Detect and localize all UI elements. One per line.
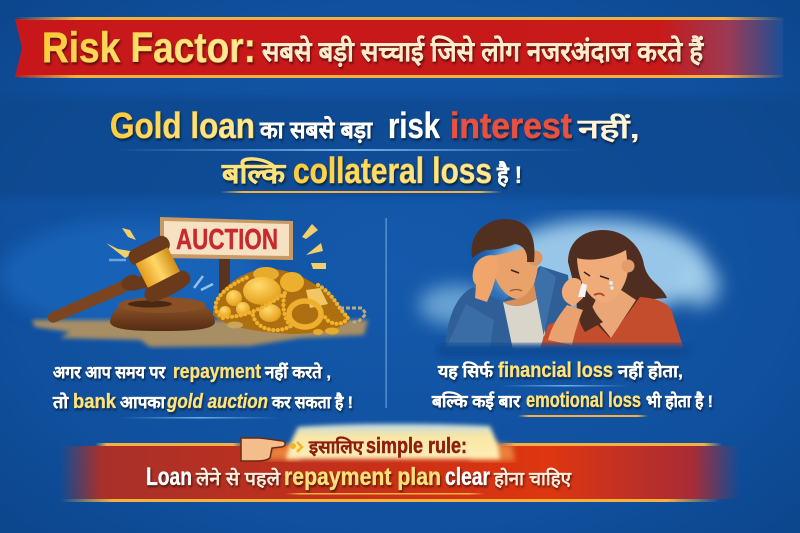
right caption line 1 [437, 359, 683, 382]
headline line 1: interest [450, 105, 572, 146]
gold pile [213, 267, 366, 335]
headline line 2: है ! [496, 161, 522, 189]
illustration: auction gavel and gold [32, 217, 368, 347]
caption line 2: कर सकता है ! [271, 392, 353, 412]
headline line 1: नहीं, [577, 113, 640, 144]
rule label: simple rule: [366, 433, 467, 458]
rule text: repayment plan [284, 463, 441, 491]
fade [438, 344, 690, 358]
rule text: clear [445, 463, 490, 491]
bottom banner [60, 424, 740, 502]
main headline [110, 105, 640, 191]
illustration: worried couple [419, 219, 720, 358]
rule label [308, 433, 467, 458]
headline line 1: Gold loan [110, 105, 255, 146]
banner highlight [265, 424, 515, 461]
rule text: Loan [146, 463, 192, 491]
left caption [52, 361, 353, 413]
man [445, 219, 575, 350]
caption line 2: आपका [120, 393, 166, 412]
gavel handle [48, 281, 127, 323]
gavel head [123, 232, 194, 306]
auction sign [160, 217, 293, 260]
gavel [48, 232, 215, 331]
caption line 1: अगर आप समय पर [53, 363, 166, 382]
caption line 2 [52, 391, 353, 413]
banner ribbon [15, 19, 783, 77]
right caption line 1: financial loss [498, 359, 613, 382]
title: Hindi subtitle: सबसे बड़ी सच्चाई जिसे लोग नजरअंदाज करते हैं [261, 35, 704, 67]
caption line 2: तो [52, 392, 69, 412]
right caption line 1: यह सिर्फ [437, 361, 494, 381]
caption line 1: नहीं करते , [264, 362, 331, 382]
headline line 1: risk [388, 105, 441, 146]
woman [540, 230, 684, 350]
arrow marker [290, 442, 302, 452]
headline line 1: का सबसे बड़ा [259, 116, 373, 144]
auction sign: AUCTION [176, 224, 278, 256]
floor [32, 320, 368, 347]
caption line 2: bank [73, 391, 117, 413]
rule text: होना चाहिए [493, 467, 572, 490]
caption line 2: gold auction [166, 391, 268, 413]
banner ribbon [60, 446, 740, 499]
headline line 2: बल्कि [221, 157, 287, 189]
headline line 1 [110, 105, 640, 146]
caption line 1 [53, 361, 331, 383]
title: Risk Factor: Risk Factor: [42, 24, 256, 72]
right caption line 2: भी होता है ! [646, 391, 713, 411]
divider [386, 218, 387, 408]
rule label: इसालिए [308, 436, 364, 457]
headline line 2: collateral loss [293, 150, 492, 191]
right caption line 2: emotional loss [526, 389, 641, 412]
pointing hand icon [241, 438, 285, 461]
pale cloud [419, 220, 720, 325]
rule text: लेने से पहले [195, 467, 281, 490]
right caption line 2: बल्कि कई बार [431, 391, 521, 411]
right caption line 2 [431, 389, 713, 412]
sparks [106, 224, 326, 290]
sign post [219, 258, 230, 294]
caption line 1: repayment [173, 361, 261, 383]
header banner [15, 17, 785, 78]
rule text [146, 463, 572, 491]
gavel base [110, 300, 215, 331]
right caption line 1: नहीं होता, [617, 361, 683, 381]
right caption [431, 359, 713, 412]
